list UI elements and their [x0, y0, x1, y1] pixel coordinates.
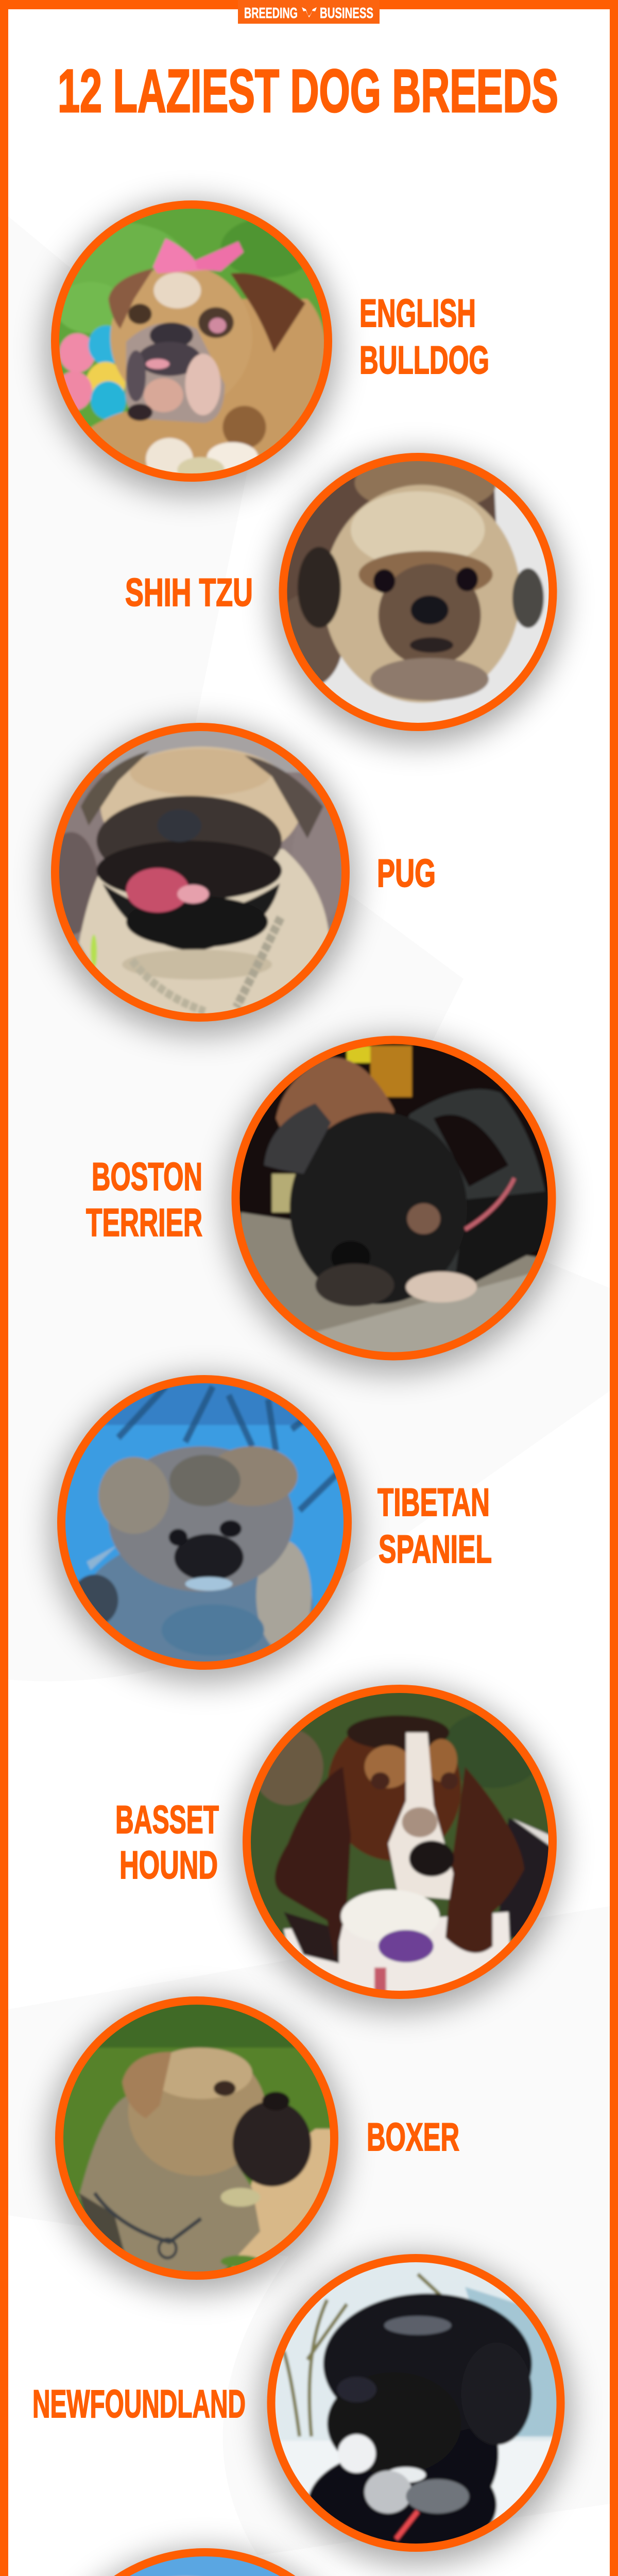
panel: Greyhound [37, 2543, 560, 2576]
label: English Bulldog: ENGLISH [359, 292, 476, 335]
photo: English Bulldog [59, 209, 324, 473]
ring: Greyhound [47, 2552, 363, 2576]
panel: Newfoundland [32, 2253, 571, 2565]
ring: English Bulldog [55, 205, 328, 478]
label: Boxer: BOXER [367, 2115, 459, 2159]
panel: Shih Tzu [125, 449, 563, 744]
photo: Basset Hound [251, 1693, 548, 1991]
header logo tab [0, 0, 618, 24]
label: Basset Hound [115, 1798, 219, 1887]
label: Tibetan Spaniel: TIBETAN [377, 1481, 490, 1524]
ring: Newfoundland [271, 2258, 560, 2548]
label: Boston Terrier: BOSTON [92, 1155, 202, 1199]
photo: Shih Tzu [287, 461, 549, 723]
ring: Boston Terrier [236, 1040, 552, 1356]
label: Shih Tzu: SHIH TZU [125, 571, 253, 615]
header logo tab: BUSINESS [320, 5, 373, 22]
panel: English Bulldog [40, 188, 489, 496]
label: Tibetan Spaniel: SPANIEL [379, 1528, 492, 1571]
photo: Boxer [63, 2005, 330, 2272]
panel: Basset Hound [115, 1681, 563, 2012]
photo: Pug [59, 731, 341, 1013]
label: Basset Hound: BASSET [115, 1798, 219, 1842]
ring: Basset Hound [247, 1689, 553, 1995]
label: English Bulldog: BULLDOG [359, 338, 489, 382]
label: Boston Terrier: TERRIER [86, 1201, 202, 1245]
header logo tab: BREEDING [244, 5, 298, 22]
label: English Bulldog [359, 292, 489, 382]
panel: Boston Terrier [86, 1033, 562, 1374]
photo: Greyhound [40, 2543, 367, 2576]
ring: Shih Tzu [283, 457, 553, 727]
photo: Boston Terrier [240, 1044, 548, 1352]
ring: Boxer [59, 2001, 334, 2276]
label: Newfoundland: NEWFOUNDLAND [32, 2382, 246, 2426]
ring: Pug [55, 727, 346, 1018]
panel: Tibetan Spaniel [51, 1369, 492, 1683]
panel: Boxer [49, 1992, 459, 2293]
label: Tibetan Spaniel [377, 1481, 492, 1571]
ring: Tibetan Spaniel [61, 1379, 348, 1666]
panel: Pug [43, 717, 436, 1035]
label: Boston Terrier [86, 1155, 202, 1245]
label: Pug: PUG [377, 852, 436, 895]
label: Basset Hound: HOUND [119, 1843, 218, 1887]
photo: Newfoundland [275, 2262, 556, 2544]
photo: Tibetan Spaniel [65, 1383, 344, 1662]
